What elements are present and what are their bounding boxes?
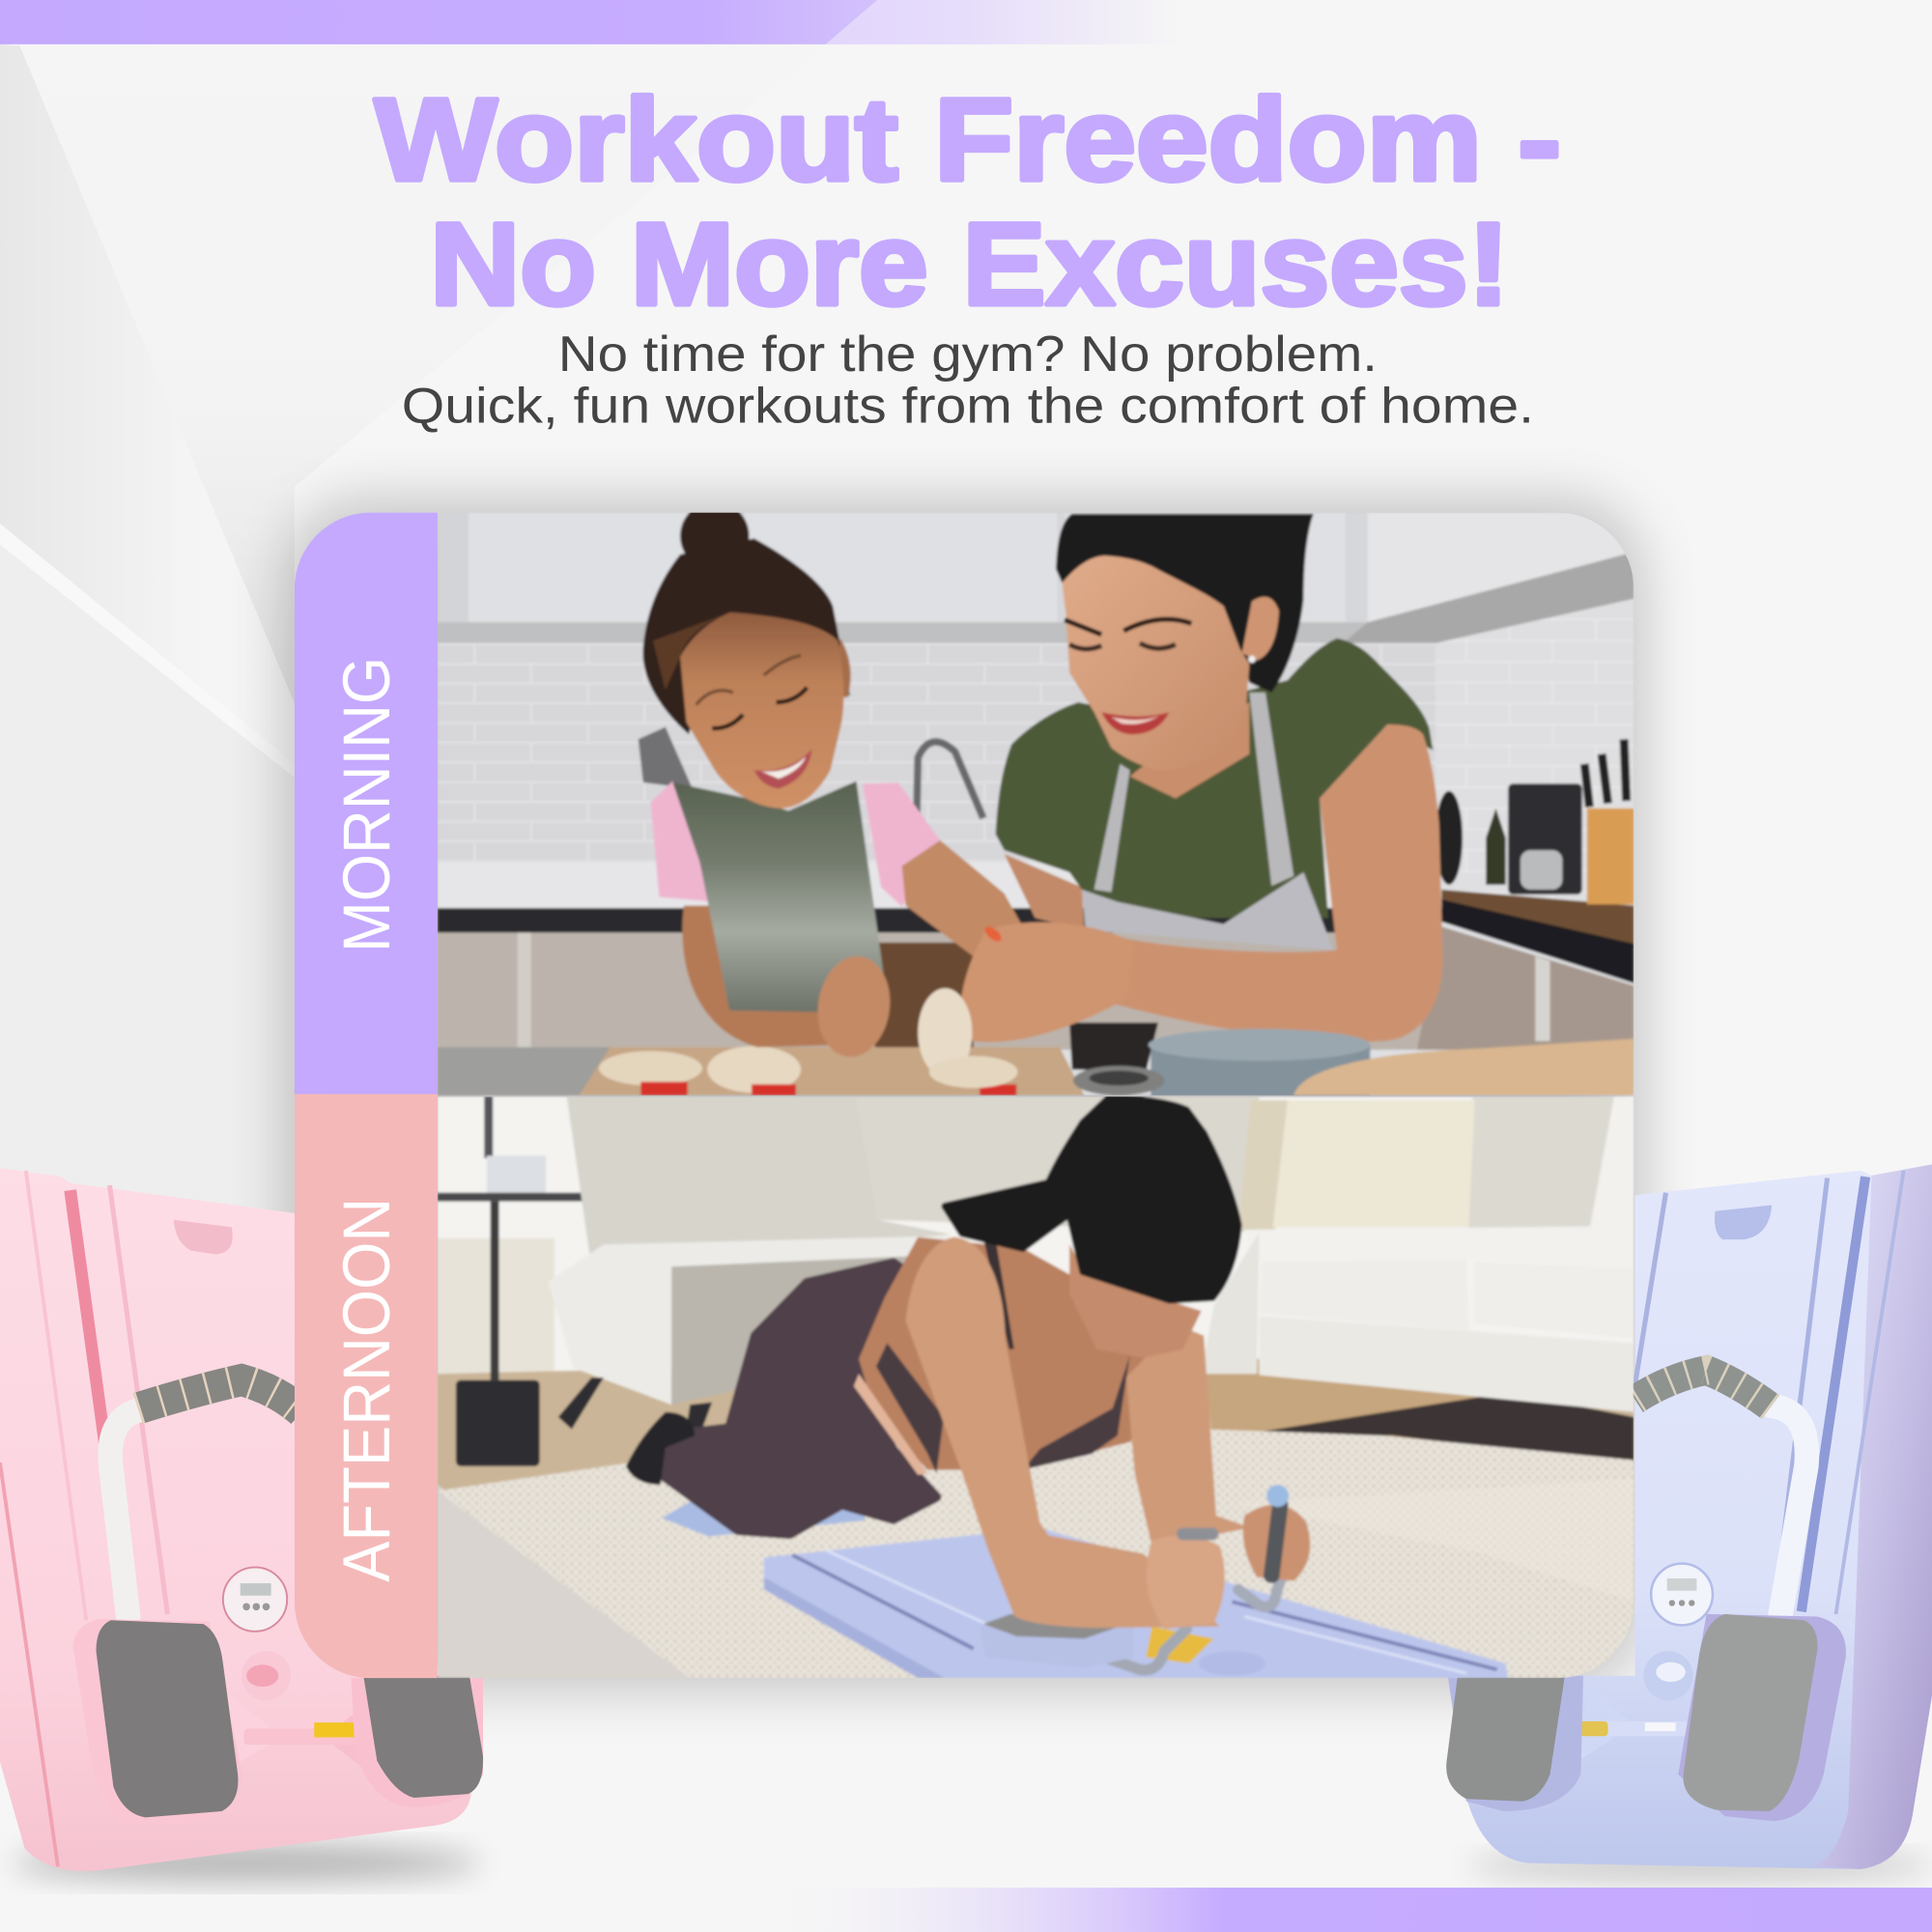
subtitle: Quick, fun workouts from the comfort of home. [402,379,1534,435]
knee mat [662,1498,865,1537]
kitchen background [438,513,1634,1095]
label: afternoon: AFTERNOON [329,1198,404,1582]
icon: carry slot [174,1220,233,1254]
pad grey left [1446,1676,1565,1802]
woman in green shirt [918,514,1443,1088]
living room background [438,1096,1634,1678]
exercise board [764,1528,1508,1678]
title: No More Excuses! [430,198,1510,329]
pad holder left [1448,1676,1583,1811]
woman doing plank [626,1097,1310,1629]
icon: timer dial [223,1567,287,1632]
connector bar with warning sticker [228,1694,366,1768]
pad holder right [1678,1614,1846,1821]
bottom gradient bar [752,1888,1932,1932]
connector bar with sticker [1567,1682,1688,1762]
icon: carry slot [1715,1205,1772,1239]
side table [438,1096,587,1466]
icon: strap hole [242,1651,291,1700]
title [375,73,1561,329]
label: morning: MORNING [329,657,404,952]
sidebar: afternoon [295,1094,438,1678]
product: lavender folding board [1446,1164,1932,1878]
foam handle [110,1380,301,1616]
plates and bread [1073,1029,1634,1096]
subtitle: No time for the gym? No problem. [558,327,1378,383]
sidebar: morning [295,513,438,1094]
top gradient bar [0,0,1182,44]
pad holder [72,1619,242,1824]
knee pad right [363,1676,483,1798]
icon: strap hole [1644,1651,1693,1700]
photo: woman planking on board in living room [438,1096,1634,1678]
product: pink folding board [0,1168,483,1880]
icon: timer dial [1651,1564,1713,1625]
right sofa and pillows [1202,1096,1634,1412]
title: Workout Freedom - [375,73,1561,205]
table with dough [438,1046,1084,1095]
left sofa [549,1096,1260,1435]
panel: two-photo card [295,501,1634,1678]
pad grey [96,1620,238,1817]
photo: mother and daughter baking [438,501,1634,1096]
girl [643,501,1035,1062]
foam handle [1635,1370,1806,1614]
subtitle [402,327,1534,435]
card drop shadow [288,502,1640,1686]
pad grey right [1683,1614,1817,1811]
knee pad holder left [352,1678,483,1807]
